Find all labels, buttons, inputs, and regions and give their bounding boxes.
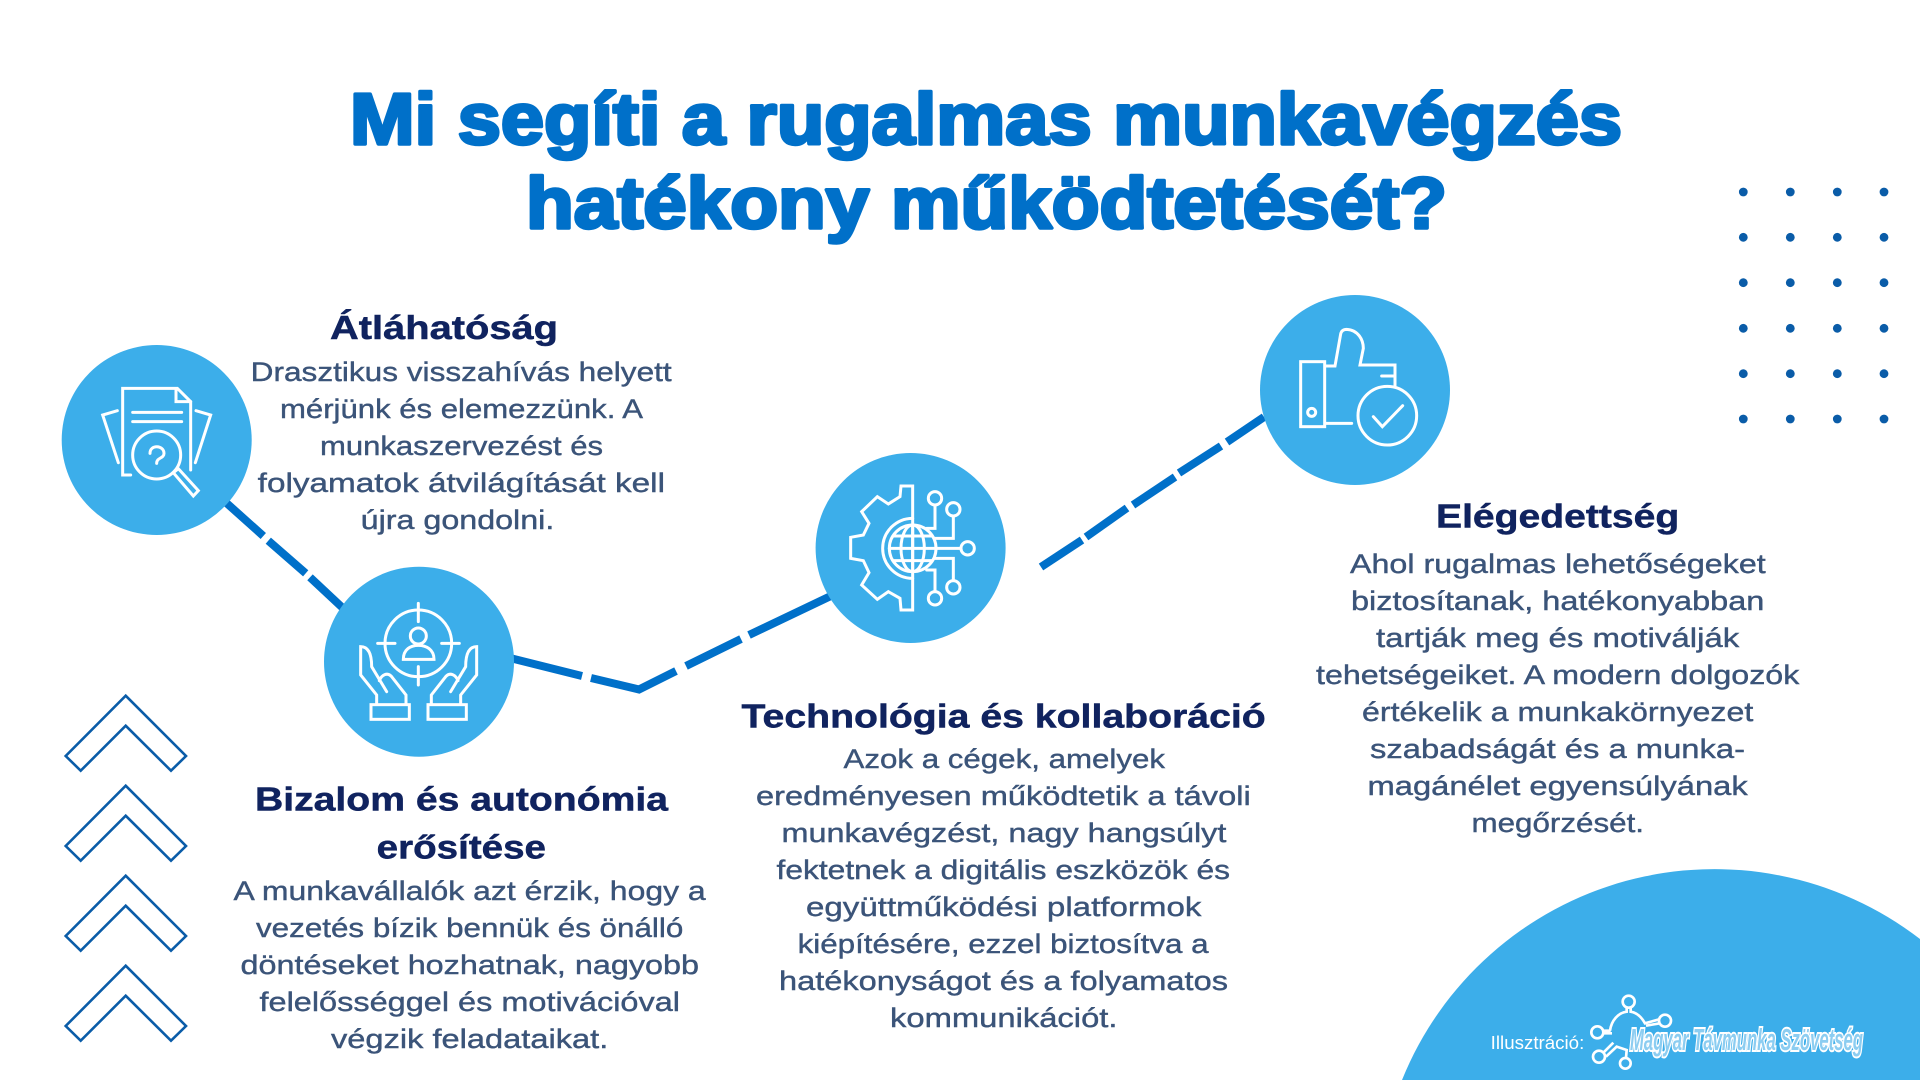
dashed connector path	[222, 417, 1264, 690]
panel: Elégedettség	[1316, 498, 1800, 838]
body text: értékelik a munkakörnyezet	[1362, 697, 1754, 727]
body text: újra gondolni.	[361, 505, 554, 535]
title	[350, 80, 1622, 244]
icon: document search circle	[62, 345, 252, 535]
credit label: Illusztráció:	[1491, 1032, 1584, 1053]
heading: Átláhatóság	[330, 309, 558, 346]
body text: megőrzését.	[1472, 808, 1644, 838]
body text: végzik feladataikat.	[331, 1024, 608, 1054]
body text: Ahol rugalmas lehetőségeket	[1350, 549, 1766, 579]
body text: A munkavállalók azt érzik, hogy a	[234, 876, 707, 906]
body text: tehetségeiket. A modern dolgozók	[1316, 660, 1800, 690]
body text: magánélet egyensúlyának	[1368, 771, 1748, 801]
body text: kommunikációt.	[890, 1003, 1118, 1033]
logo: molecule mark	[1591, 996, 1671, 1069]
panel: Bizalom és autonómia	[234, 781, 707, 1054]
body text: munkavégzést, nagy hangsúlyt	[782, 818, 1227, 848]
body text: Azok a cégek, amelyek	[844, 744, 1166, 774]
body text: együttműködési platformok	[806, 892, 1202, 922]
dot grid decoration	[1739, 188, 1888, 423]
panel: Technológia és kollaboráció	[742, 698, 1266, 1033]
body text: munkaszervezést és	[320, 431, 603, 461]
body text: felelősséggel és motivációval	[260, 987, 680, 1017]
body text: mérjünk és elemezzünk. A	[280, 394, 643, 424]
body text: vezetés bízik bennük és önálló	[256, 913, 683, 943]
title: hatékony működtetését?	[526, 164, 1447, 244]
body text: kiépítésére, ezzel biztosítva a	[798, 929, 1210, 959]
body text: folyamatok átvilágítását kell	[258, 468, 665, 498]
icon: thumbs up check circle	[1260, 295, 1450, 485]
heading: erősítése	[377, 828, 546, 865]
body text: szabadságát és a munka-	[1370, 734, 1745, 764]
body text: Drasztikus visszahívás helyett	[251, 357, 672, 387]
heading: Elégedettség	[1436, 498, 1679, 534]
title: Mi segíti a rugalmas munkavégzés	[350, 80, 1622, 160]
icon: technology gear and globe circle	[816, 453, 1006, 643]
icon: trust hands circle	[324, 567, 514, 757]
heading: Bizalom és autonómia	[255, 781, 669, 818]
body text	[756, 744, 1251, 1033]
body text: döntéseket hozhatnak, nagyobb	[240, 950, 699, 980]
heading: Technológia és kollaboráció	[742, 698, 1266, 735]
body text	[234, 876, 707, 1054]
body text: fektetnek a digitális eszközök és	[776, 855, 1230, 885]
panel: Átláthatóság	[251, 309, 672, 535]
heading	[255, 781, 669, 865]
corner blob with credit	[1402, 869, 1920, 1080]
body text	[251, 357, 672, 535]
body text: biztosítanak, hatékonyabban	[1351, 586, 1764, 616]
body text	[1316, 549, 1800, 838]
body text: tartják meg és motiválják	[1376, 623, 1740, 653]
chevron arrows	[66, 696, 186, 1041]
body text: eredményesen működtetik a távoli	[756, 781, 1251, 811]
body text: hatékonyságot és a folyamatos	[779, 966, 1228, 996]
